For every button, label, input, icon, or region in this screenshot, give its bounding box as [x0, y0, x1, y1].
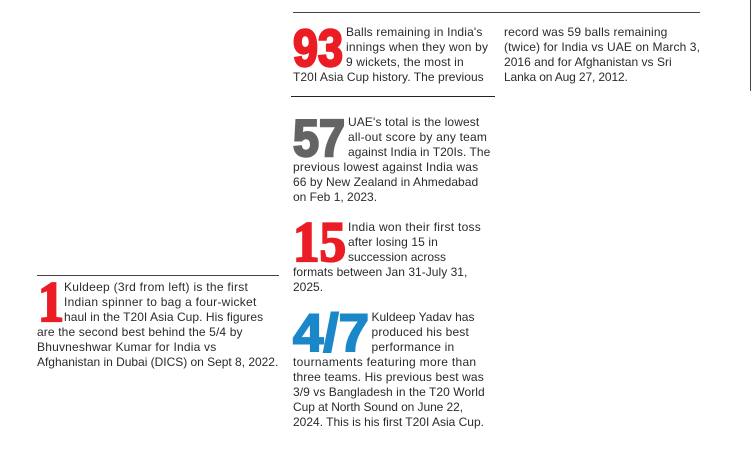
text: 4/7: Cup at North Sound on June 22, [293, 400, 463, 414]
text: 93 second column: Lanka on Aug 27, 2012. [504, 70, 628, 84]
text: 1: are the second best behind the 5/4 by [37, 325, 243, 339]
text: 4/7 [293, 310, 485, 429]
text: 15: formats between Jan 31-July 31, [293, 265, 467, 279]
text: 1: haul in the T20I Asia Cup. His figures [64, 310, 263, 324]
text: 57 [293, 115, 490, 204]
text: 4/7: tournaments featuring more than [293, 355, 476, 369]
text: 93 first column: T20I Asia Cup history. The previous [293, 70, 484, 84]
text: 57: 66 by New Zealand in Ahmedabad [293, 175, 478, 189]
stat panel: 57 lowest total [293, 110, 490, 204]
stat panel: 15 tosses [293, 211, 481, 294]
text: 57: on Feb 1, 2023. [293, 190, 377, 204]
text: 57: UAE's total is the lowest [348, 115, 479, 129]
text: 15 [293, 220, 481, 294]
text: 93 first column: Balls remaining in India's [346, 25, 483, 39]
number: 57: 57 [293, 110, 345, 168]
text: 4/7: performance in [372, 340, 454, 354]
text: 4/7: three teams. His previous best was [293, 370, 484, 384]
text: 4/7: 2024. This is his first T20I Asia Cup. [293, 415, 484, 429]
text: 93 second column: (twice) for India vs UAE on March 3, [504, 40, 700, 54]
text: 15: India won their first toss [348, 220, 481, 234]
text: 15: 2025. [293, 280, 323, 294]
stat panel: 1 first Indian spinner [37, 271, 278, 369]
text: 4/7: 3/9 vs Bangladesh in the T20 World [293, 385, 485, 399]
text: 1: Kuldeep (3rd from left) is the first [64, 280, 248, 294]
rule: above 1 [37, 275, 279, 276]
number: 1: 1 [38, 271, 64, 334]
text: 93 first column: innings when they won by [346, 40, 488, 54]
rule: top of column [293, 12, 700, 13]
stat panel: 93 balls remaining [293, 20, 700, 84]
stat panel: 4/7 best figures [292, 304, 485, 429]
text: 1: Afghanistan in Dubai (DICS) on Sept 8, 2022. [37, 355, 278, 369]
text: 1: Indian spinner to bag a four-wicket [64, 295, 257, 309]
number: 93: 93 [293, 20, 343, 78]
number: 4/7: 4/7 [293, 304, 369, 363]
text: 15: succession across [348, 250, 446, 264]
page edge line [750, 0, 751, 91]
text: 1 [37, 280, 278, 369]
text: 57: against India in T20Is. The [348, 145, 490, 159]
text: 4/7: produced his best [372, 325, 469, 339]
text: 15: after losing 15 in [348, 235, 438, 249]
text: 57: previous lowest against India was [293, 160, 478, 174]
rule: below 93 [291, 96, 495, 97]
text: 93 first column [293, 25, 488, 84]
text: 57: all-out score by any team [348, 130, 487, 144]
text: 93 second column: record was 59 balls remaining [504, 25, 667, 39]
number: 15: 15 [293, 211, 346, 274]
text: 1: Bhuvneshwar Kumar for India vs [37, 340, 216, 354]
text: 93 first column: 9 wickets, the most in [346, 55, 464, 69]
text: 93 second column [504, 25, 700, 84]
text: 4/7: Kuldeep Yadav has [372, 310, 474, 324]
text: 93 second column: 2016 and for Afghanistan vs Sri [504, 55, 672, 69]
